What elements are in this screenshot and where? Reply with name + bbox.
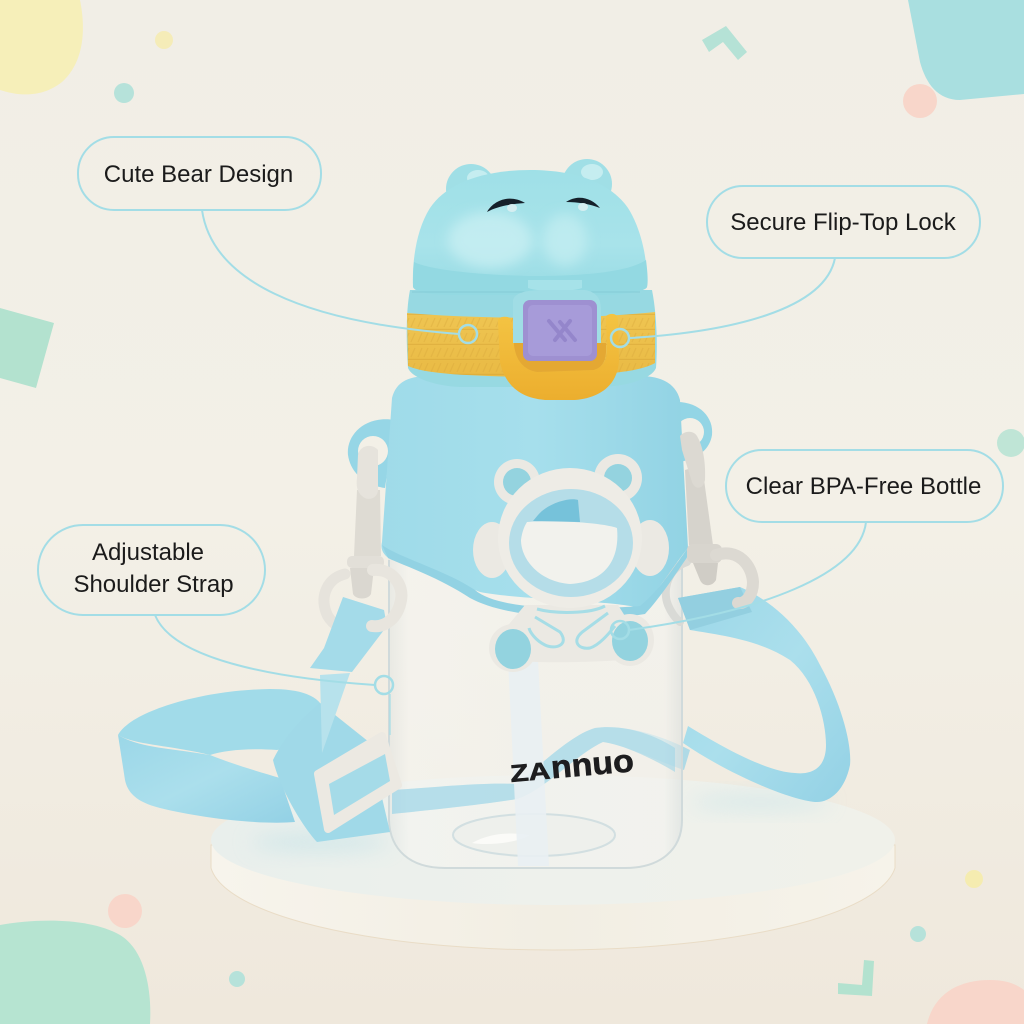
label: secure flip-top lock: Secure Flip-Top Lock — [730, 209, 957, 236]
dome — [413, 170, 647, 295]
label: adjustable shoulder strap: Adjustable — [92, 539, 204, 566]
medallion body — [500, 605, 640, 662]
left carabiner clip — [347, 446, 401, 626]
lower collar — [407, 290, 657, 387]
label: clear BPA-free bottle — [726, 450, 1003, 522]
right carabiner clip — [680, 432, 753, 603]
connector: clear bottle — [611, 522, 866, 639]
clear bottle — [388, 540, 682, 868]
label: adjustable shoulder strap: Shoulder Strap — [73, 571, 234, 598]
label: cute bear design — [78, 137, 321, 210]
brand logo: ZA — [509, 758, 551, 788]
ring window — [498, 468, 642, 608]
yellow latch — [498, 314, 619, 400]
purple lock button — [523, 300, 597, 361]
lid tab — [528, 280, 582, 291]
lid seam — [412, 291, 640, 293]
connector: flip-top lock — [611, 258, 835, 347]
lock housing — [513, 290, 601, 343]
strap slider buckle — [318, 736, 398, 829]
label: cute bear design: Cute Bear Design — [104, 161, 293, 188]
flip-top lid — [407, 159, 657, 400]
straw — [508, 660, 549, 866]
latch inner step — [514, 343, 606, 372]
upper blue body — [348, 376, 712, 618]
lid rim — [413, 260, 648, 295]
brand logo — [508, 742, 635, 789]
dome highlights — [448, 212, 587, 268]
left D-ring back — [324, 574, 345, 625]
gold grip band — [407, 312, 655, 377]
brand logo: nnuo — [549, 742, 635, 785]
bear eyes — [487, 198, 600, 212]
strap tab at ring — [310, 597, 387, 672]
bear medallion — [473, 454, 669, 672]
medallion limb lines — [529, 606, 615, 648]
medallion ears — [473, 454, 669, 578]
connector: shoulder strap — [155, 615, 393, 735]
strap passing behind bottle — [392, 727, 690, 814]
shoulder strap: right loop — [678, 587, 850, 802]
connector: cute bear design — [202, 210, 477, 343]
right D-ring seen through bottle — [666, 562, 687, 622]
bear ears — [446, 159, 612, 214]
display platform — [211, 775, 895, 950]
label: secure flip-top lock — [707, 186, 980, 258]
medallion feet — [489, 614, 654, 672]
label: adjustable shoulder strap — [38, 525, 265, 615]
label: clear BPA-free bottle: Clear BPA-Free Bottle — [746, 473, 981, 500]
shoulder strap: left loop — [118, 673, 390, 842]
